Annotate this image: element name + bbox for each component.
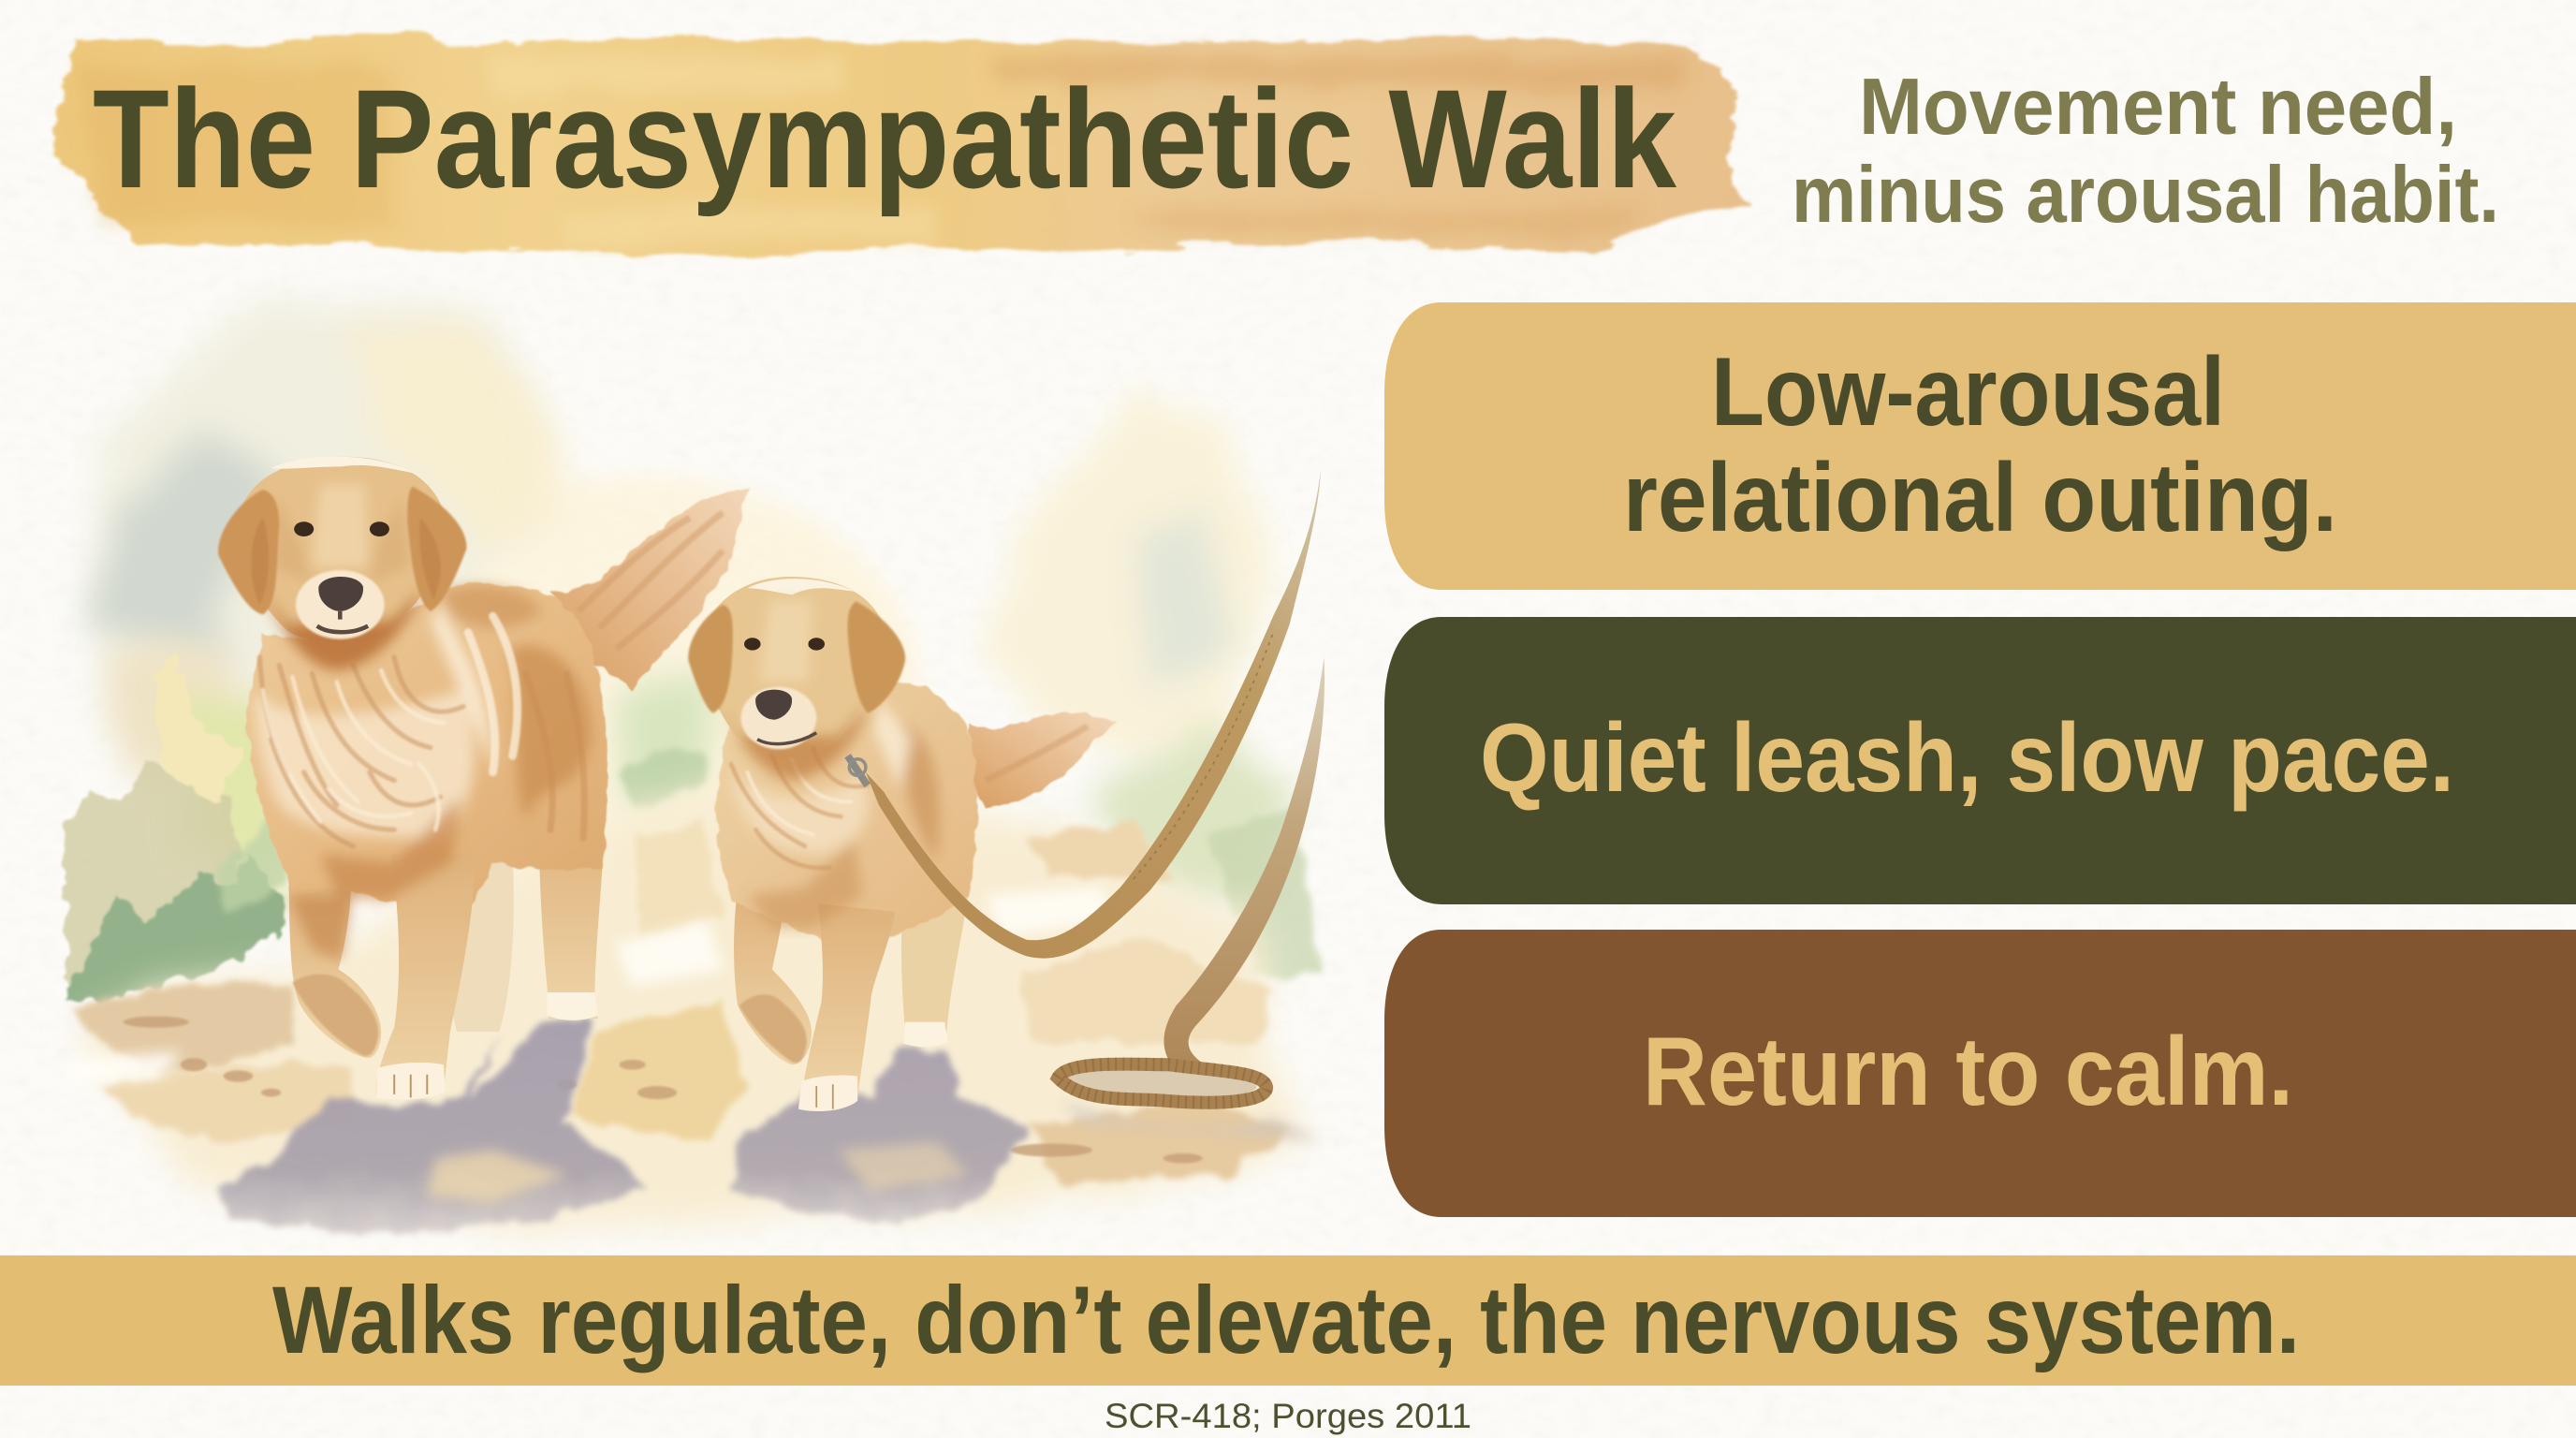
body	[717, 682, 977, 940]
panel: low-arousal: Low-arousal	[1711, 338, 2225, 447]
body	[246, 583, 607, 903]
illustration: two golden retrievers walking on a loose leash	[59, 292, 1325, 1236]
tail	[550, 486, 749, 690]
head	[238, 457, 447, 641]
chest fur strands	[259, 616, 584, 846]
muzzle	[741, 687, 816, 749]
raised front leg	[289, 871, 381, 1058]
big dog	[218, 457, 749, 1099]
panel: return to calm: Return to calm.	[1643, 1018, 2293, 1126]
subtitle	[1792, 63, 2499, 240]
panel: quiet leash: Quiet leash, slow pace.	[1480, 704, 2454, 813]
front leg	[800, 903, 895, 1109]
panel: low-arousal: relational outing.	[1623, 444, 2337, 552]
small dog	[688, 577, 1117, 1111]
leash taut section from collar to upper tip	[848, 470, 1321, 959]
source credit: SCR-418; Porges 2011	[1105, 1397, 1471, 1435]
pale gaps in the path	[66, 888, 1117, 1084]
main front leg	[376, 855, 476, 1097]
eyes and nose	[294, 521, 314, 536]
cast shadows	[213, 1019, 1027, 1236]
panel: quiet leash	[1384, 617, 2576, 904]
head	[702, 577, 887, 750]
rear leg	[901, 888, 969, 1045]
raised leg	[734, 888, 812, 1064]
fur detail	[731, 698, 940, 929]
eyes and nose	[744, 638, 761, 651]
subtitle: Movement need,	[1859, 63, 2457, 152]
ears	[218, 490, 279, 614]
title banner	[49, 30, 1752, 253]
muzzle	[296, 570, 385, 639]
watercolor brush stroke	[49, 30, 1752, 253]
loose leash coil on the ground	[1058, 657, 1325, 1142]
bush on the left	[59, 653, 292, 1003]
leash clip	[848, 756, 868, 785]
tail	[969, 712, 1117, 808]
coat markings	[255, 585, 592, 961]
subtitle: minus arousal habit.	[1792, 151, 2499, 240]
background wash	[91, 292, 1323, 977]
title text: The Parasympathetic Walk	[93, 60, 1677, 217]
banner wash tones	[75, 56, 1685, 243]
takeaway bar: Walks regulate, don’t elevate, the nervous system.	[272, 1267, 2300, 1373]
panel: low-arousal	[1384, 302, 2576, 590]
panel: return to calm	[1384, 930, 2576, 1217]
rear legs	[539, 814, 605, 1019]
dirt path	[66, 788, 1297, 1224]
ears	[688, 605, 733, 713]
